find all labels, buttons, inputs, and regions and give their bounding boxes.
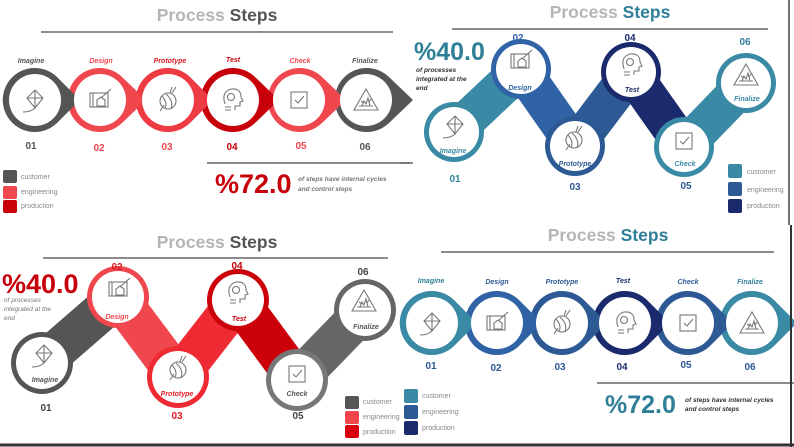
legend: production [422, 425, 455, 432]
legend [728, 164, 784, 213]
step labels: Check [289, 58, 312, 65]
step numbers: 02 [111, 262, 123, 273]
step numbers: 03 [554, 362, 566, 373]
legend: production [747, 203, 780, 210]
stat callout: %40.0 [2, 269, 79, 299]
zigzag chain: Test [232, 316, 247, 323]
step numbers: 01 [425, 361, 437, 372]
stat callout: of processes [4, 297, 42, 304]
stat callout: and control steps [298, 186, 353, 193]
step labels: Imagine [418, 278, 444, 285]
title: Process Steps [157, 5, 278, 25]
legend: production [21, 203, 54, 210]
stat callout: of steps have internal cycles [685, 397, 774, 404]
stat callout: %40.0 [414, 38, 485, 66]
legend [345, 396, 400, 438]
stat callout: integrated at the [4, 306, 51, 313]
step numbers [449, 33, 751, 193]
step labels: Test [226, 57, 241, 64]
stat callout: of steps have internal cycles [298, 176, 387, 183]
step chain [3, 68, 413, 132]
step numbers: 04 [624, 33, 636, 44]
zigzag chain: Prototype [161, 391, 193, 398]
step labels: Check [677, 279, 700, 286]
zigzag chain [424, 39, 776, 177]
stat callout: %72.0 [605, 391, 676, 419]
stat callout [2, 269, 79, 322]
legend [404, 389, 459, 435]
panel: top-left horizontal steps [3, 5, 413, 213]
zigzag chain: Check [674, 161, 697, 168]
legend: customer [21, 174, 50, 181]
title: Process Steps [157, 232, 278, 252]
zigzag chain: Finalize [353, 324, 379, 331]
step numbers: 06 [357, 267, 369, 278]
legend: production [363, 429, 396, 436]
step labels: Design [485, 279, 509, 286]
step numbers: 04 [616, 362, 628, 373]
legend: engineering [747, 187, 784, 194]
step labels: Prototype [154, 58, 186, 65]
stat callout: %72.0 [215, 169, 292, 199]
step labels: Finalize [737, 279, 763, 286]
step numbers: 06 [739, 37, 751, 48]
step numbers: 03 [161, 142, 173, 153]
step chain [400, 291, 794, 355]
stat callout: end [4, 315, 15, 322]
step numbers: 02 [490, 363, 502, 374]
step numbers: 03 [569, 182, 581, 193]
zigzag chain: Design [105, 314, 129, 321]
stat callout [414, 38, 485, 92]
step numbers: 01 [449, 174, 461, 185]
zigzag chain: Check [286, 391, 309, 398]
step labels: Imagine [18, 58, 44, 65]
step numbers: 02 [512, 33, 524, 44]
stat callout: end [416, 85, 429, 92]
step numbers [40, 261, 369, 422]
step labels [418, 278, 763, 286]
panel: bottom-right horizontal steps [400, 225, 794, 447]
step labels: Test [616, 278, 631, 285]
legend: customer [363, 399, 392, 406]
legend: engineering [363, 414, 400, 421]
legend [3, 170, 58, 213]
step numbers: 04 [231, 261, 243, 272]
zigzag chain [11, 266, 396, 411]
panel: bottom-left zigzag steps [2, 232, 400, 438]
step numbers: 05 [292, 411, 304, 422]
step numbers: 05 [295, 141, 307, 152]
zigzag chain: Imagine [32, 377, 58, 384]
zigzag chain: Design [508, 85, 532, 92]
stat callout: of processes [416, 67, 456, 74]
step labels: Finalize [352, 58, 378, 65]
stat callout: integrated at the [416, 76, 467, 83]
step numbers: 06 [359, 142, 371, 153]
zigzag chain: Prototype [559, 161, 591, 168]
zigzag chain: Finalize [734, 96, 760, 103]
legend: engineering [422, 409, 459, 416]
stat callout [605, 391, 774, 419]
legend: customer [747, 169, 776, 176]
step numbers: 06 [744, 362, 756, 373]
step numbers: 05 [680, 360, 692, 371]
zigzag chain: Imagine [440, 148, 466, 155]
step numbers [25, 141, 371, 154]
stat callout [215, 169, 387, 199]
step numbers: 02 [93, 143, 105, 154]
title: Process Steps [550, 2, 671, 22]
zigzag chain: Test [625, 87, 640, 94]
step numbers: 05 [680, 181, 692, 192]
stat callout: and control steps [685, 406, 740, 413]
step labels: Prototype [546, 279, 578, 286]
legend: customer [422, 393, 451, 400]
step numbers: 01 [25, 141, 37, 152]
step labels [18, 57, 378, 65]
step labels: Design [89, 58, 113, 65]
step numbers: 03 [171, 411, 183, 422]
legend: engineering [21, 189, 58, 196]
step numbers: 01 [40, 403, 52, 414]
panel: top-right zigzag steps [400, 0, 789, 225]
title: Process Steps [548, 225, 669, 245]
step numbers: 04 [226, 142, 238, 153]
step numbers [425, 360, 756, 374]
